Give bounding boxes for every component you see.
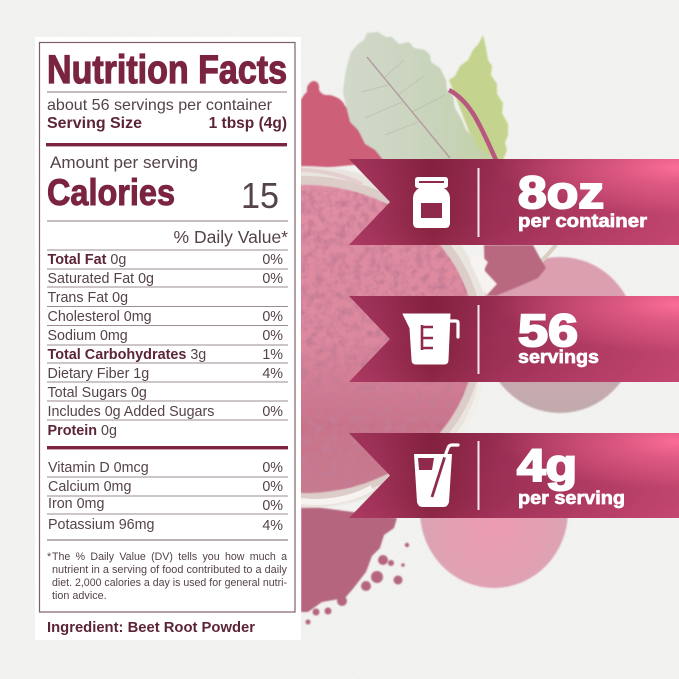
beet stalk <box>541 245 556 262</box>
nutrient table: Total Carbohydrates 3g <box>48 347 206 363</box>
footnote <box>47 551 288 602</box>
footnote: diet. 2,000 calories a day is used for general nutri- <box>52 577 287 589</box>
vitamins and minerals: Calcium 0mg <box>48 479 131 495</box>
caption: per container: per container <box>518 210 647 231</box>
vitamins and minerals <box>48 460 283 534</box>
panel: nutrition facts: 15 <box>241 175 279 216</box>
nutrient table: Cholesterol 0mg <box>48 309 152 325</box>
vitamins and minerals: Potassium 96mg <box>48 517 155 533</box>
nutrient table: Sodium 0mg <box>48 328 128 344</box>
nutrient table: 0% <box>262 252 283 268</box>
nutrient table: 4% <box>262 366 283 382</box>
vitamins and minerals: Vitamin D 0mcg <box>48 460 149 476</box>
beet top right <box>484 257 636 413</box>
ribbon: 56 servings <box>349 296 679 382</box>
nutrient table: 0% <box>262 404 283 420</box>
white card <box>35 37 301 640</box>
nutrient table: Total Fat 0g <box>48 252 126 268</box>
nutrient table: Includes 0g Added Sugars <box>48 404 214 420</box>
beet bottom <box>420 434 568 588</box>
caption: servings: servings <box>518 346 599 367</box>
ribbon: 8oz per container <box>349 159 679 245</box>
nutrient table: 1% <box>262 347 283 363</box>
powder spill bottom <box>301 505 409 624</box>
caption: per serving: per serving <box>518 487 625 508</box>
beet leaf back <box>449 35 508 160</box>
background photo: beets, powder and leaves <box>120 32 636 624</box>
footnote: tion advice. <box>52 590 107 602</box>
ribbon: 4g per serving <box>349 433 679 518</box>
value: 56: 56 <box>518 305 578 356</box>
icon: glass with straw <box>414 445 458 507</box>
vitamins and minerals: 0% <box>262 479 283 495</box>
powder texture <box>135 185 475 493</box>
icon: jar <box>413 177 450 228</box>
nutrient table: Dietary Fiber 1g <box>48 366 149 382</box>
vitamins and minerals: 4% <box>262 518 283 534</box>
heading: Nutrition Facts <box>47 48 287 92</box>
nutrient table: 0% <box>262 309 283 325</box>
footnote: nutrient in a serving of food contributed to a daily <box>52 564 288 576</box>
leaf veins <box>362 60 445 135</box>
calories: Calories <box>47 172 175 213</box>
beet leaf front <box>343 32 497 160</box>
bowl rim highlight <box>301 170 362 184</box>
value: 4g: 4g <box>517 440 577 491</box>
value: 8oz: 8oz <box>518 167 604 218</box>
icon: measuring cup <box>403 314 458 364</box>
powder pile top <box>301 81 384 170</box>
daily value: % Daily Value* <box>174 227 288 247</box>
vitamins and minerals: 0% <box>262 460 283 476</box>
nutrient table <box>48 252 283 439</box>
footnote: * <box>47 551 52 563</box>
vitamins and minerals: Iron 0mg <box>48 496 104 512</box>
nutrient table: 0% <box>262 328 283 344</box>
footnote: The % Daily Value (DV) tells you how much a <box>52 551 287 563</box>
nutrient table: Protein 0g <box>48 423 117 439</box>
panel: nutrition facts <box>35 37 301 640</box>
panel: nutrition facts: 1 tbsp (4g) <box>209 115 287 132</box>
nutrient table: 0% <box>262 271 283 287</box>
nutrient table: Total Sugars 0g <box>48 385 147 401</box>
vitamins and minerals: 0% <box>262 498 283 514</box>
amount per serving: Amount per serving <box>50 154 198 172</box>
leaf stem <box>449 90 496 160</box>
nutrient table: Trans Fat 0g <box>48 290 128 306</box>
label border <box>40 42 295 612</box>
bowl powder <box>135 185 475 493</box>
ingredient: Ingredient: Beet Root Powder <box>47 619 255 636</box>
glass bowl <box>120 166 490 508</box>
serving size: Serving Size <box>47 115 142 132</box>
nutrient table: Saturated Fat 0g <box>48 271 154 287</box>
servings: about 56 servings per container <box>47 97 273 114</box>
